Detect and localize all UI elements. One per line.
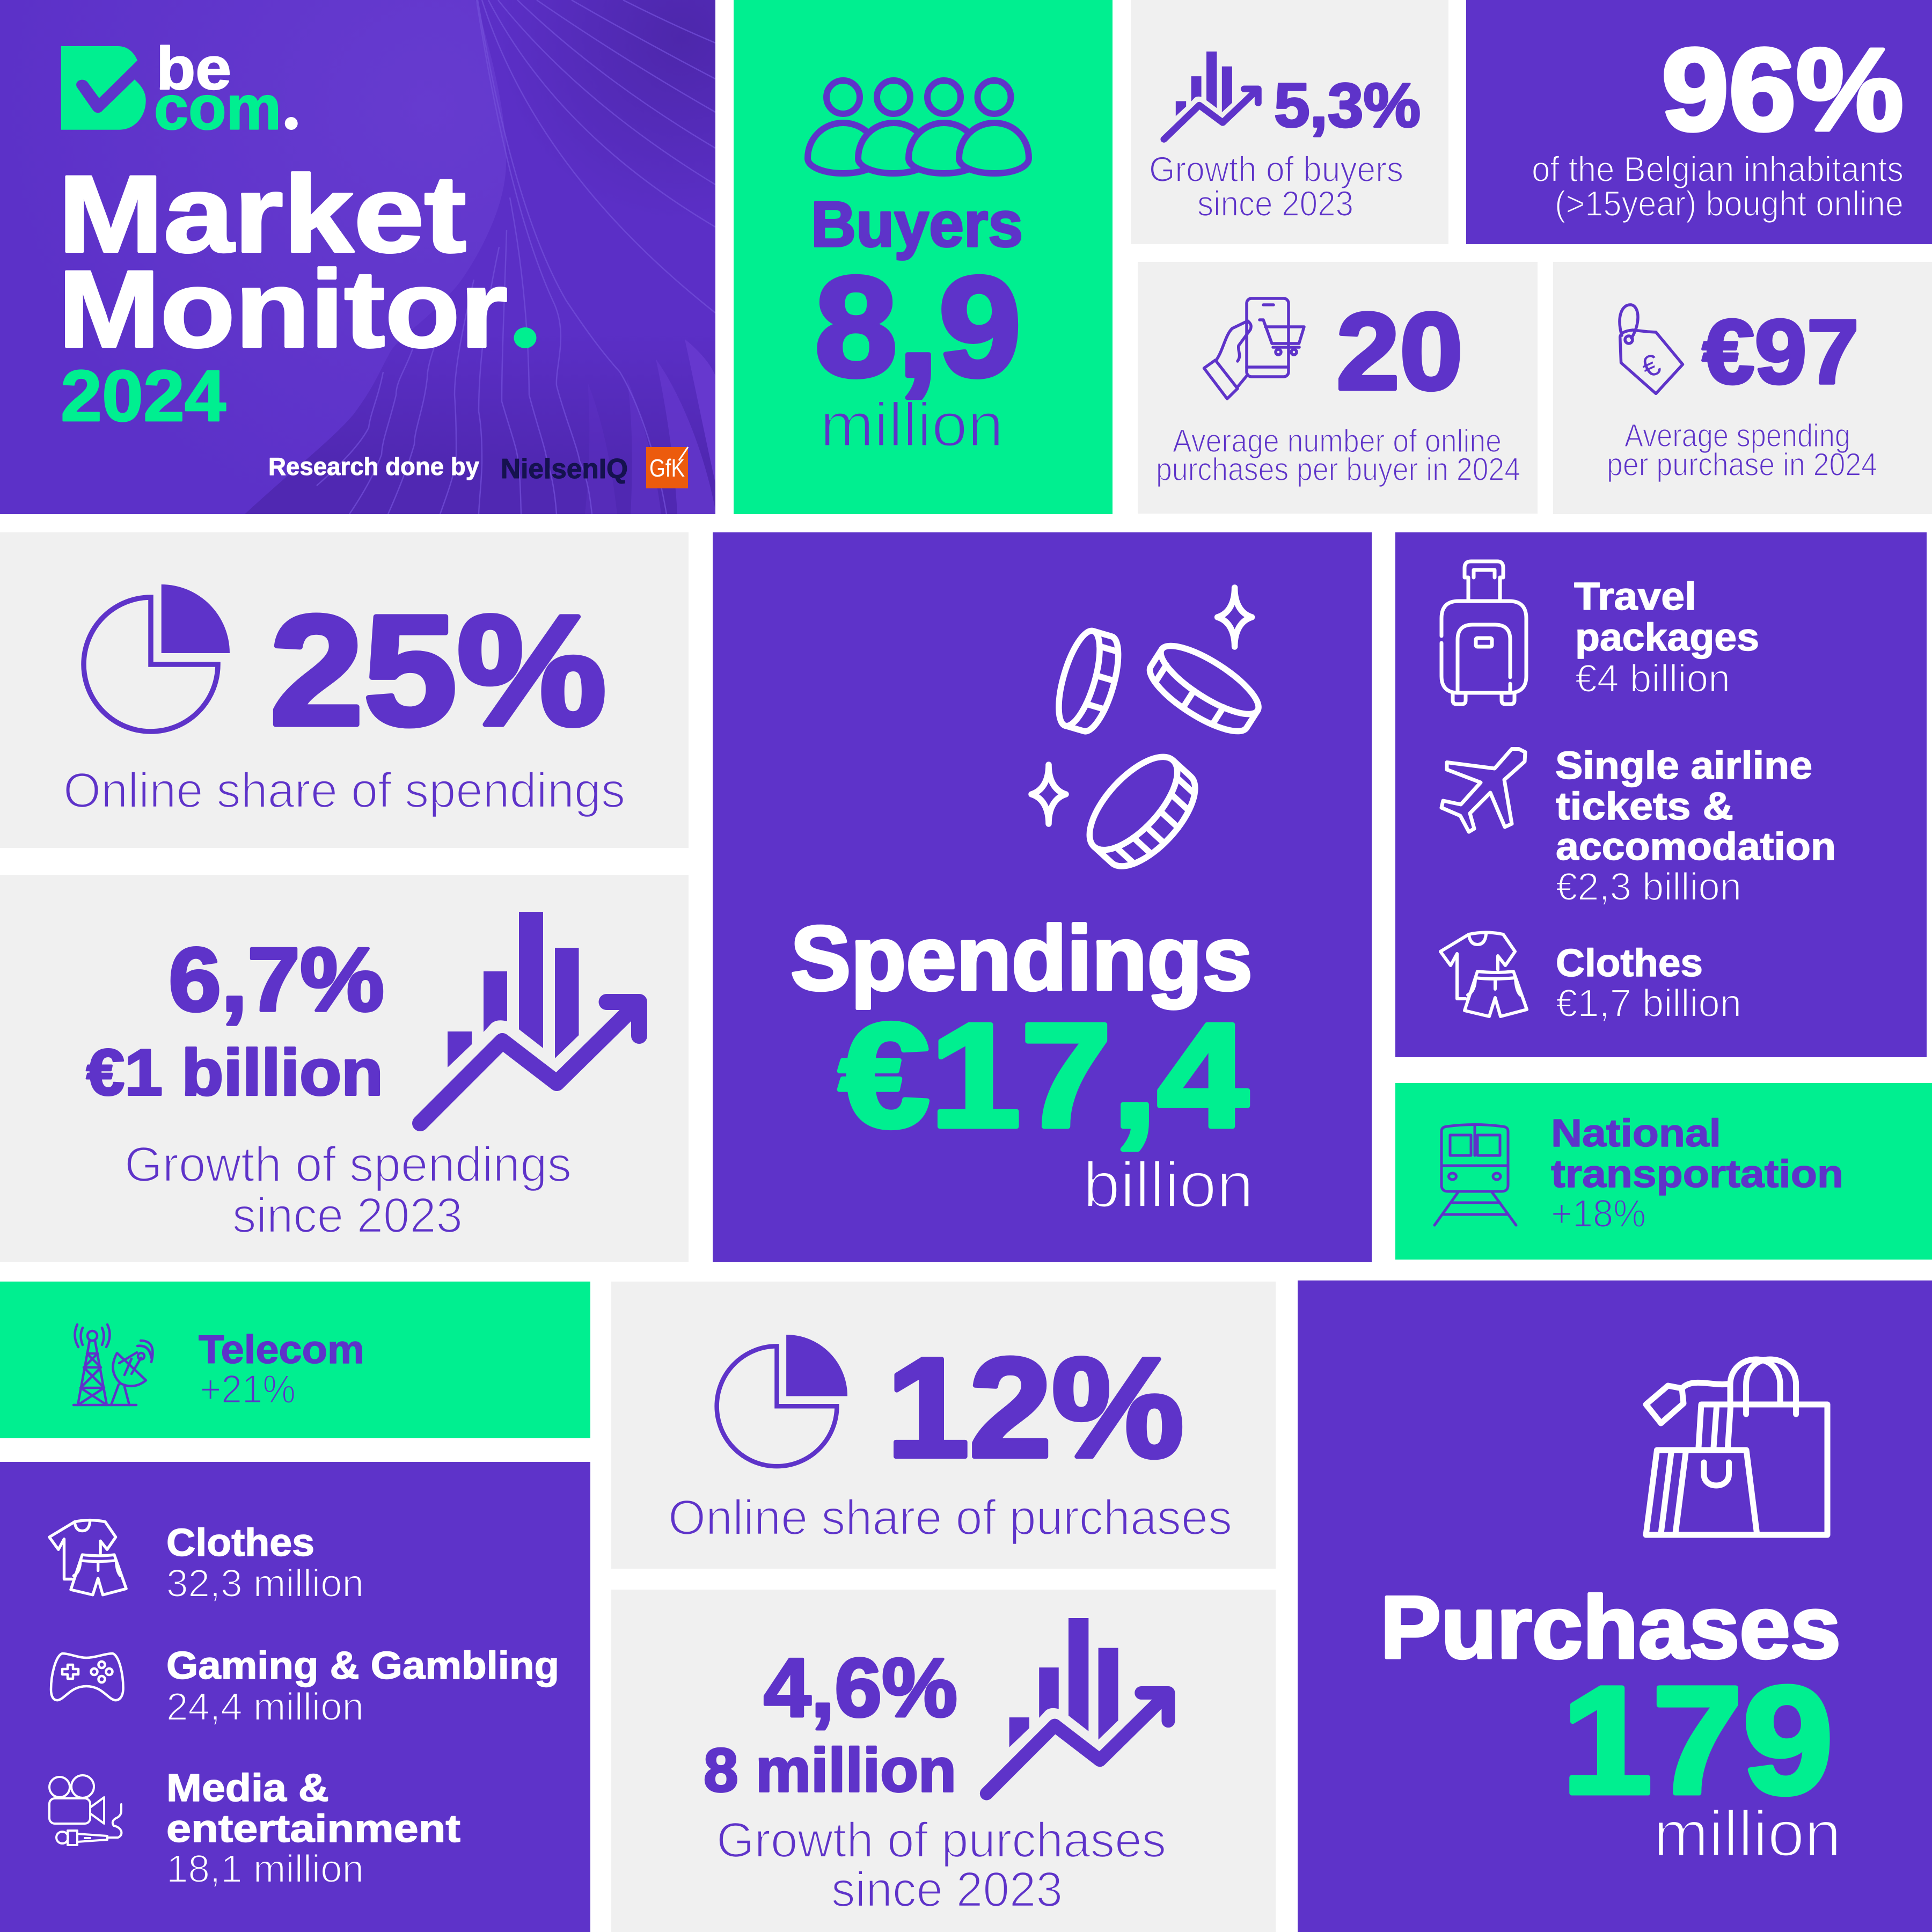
icon: film camera and microphone xyxy=(49,1775,121,1845)
research credit: Research done by xyxy=(268,452,479,480)
icon: chart xyxy=(1164,52,1258,140)
caption: of the Belgian inhabitants xyxy=(1532,149,1904,189)
logo: be xyxy=(156,35,231,102)
value: €97 xyxy=(1702,301,1859,403)
caption: Average number of online xyxy=(1173,423,1502,459)
caption: per purchase in 2024 xyxy=(1607,447,1877,482)
category: national transportation: transportation xyxy=(1551,1153,1843,1196)
category: media and entertainment xyxy=(166,1767,460,1891)
panel: growth of spendings xyxy=(0,875,689,1262)
panel: spending categories xyxy=(1395,532,1927,1057)
caption: Growth of buyers xyxy=(1149,149,1403,189)
panel: spending per purchase xyxy=(1553,262,1932,514)
category: telecom: Telecom xyxy=(199,1327,364,1372)
value: amount: 8 million xyxy=(704,1736,956,1805)
category: clothes xyxy=(1556,942,1741,1025)
caption: Online share of spendings xyxy=(63,763,625,818)
heading: Buyers xyxy=(811,188,1023,260)
caption: since 2023 xyxy=(1197,184,1353,223)
category: travel packages: packages xyxy=(1575,616,1759,659)
icon: clothes xyxy=(49,1520,126,1595)
caption: since 2023 xyxy=(831,1862,1063,1917)
header background fan xyxy=(215,0,715,515)
value: 20 xyxy=(1336,290,1463,413)
category: telecom: +21% xyxy=(200,1367,296,1411)
category: travel packages xyxy=(1574,575,1759,700)
unit: million xyxy=(820,391,1004,459)
category: gaming and gambling xyxy=(166,1644,559,1729)
icon: coins and sparkles xyxy=(1031,588,1267,880)
caption: Growth of spendings xyxy=(125,1137,572,1192)
panel: purchases xyxy=(1298,1280,1932,1932)
caption: purchases per buyer in 2024 xyxy=(1156,451,1520,487)
category: clothes: Clothes xyxy=(166,1521,314,1564)
category: clothes: €1,7 billion xyxy=(1556,982,1741,1025)
category: airline tickets: tickets & xyxy=(1556,785,1733,828)
category: national transportation: National xyxy=(1551,1112,1721,1155)
title: Monitor xyxy=(58,248,508,370)
icon: suitcase xyxy=(1441,561,1526,704)
caption xyxy=(1607,418,1877,482)
year: 2024 xyxy=(61,355,226,436)
category: airline tickets: €2,3 billion xyxy=(1556,866,1741,909)
category: national transportation: +18% xyxy=(1551,1192,1646,1235)
icon: chart xyxy=(986,1618,1168,1794)
icon: game controller xyxy=(51,1653,123,1700)
logo: com xyxy=(154,73,281,143)
category: travel packages: €4 billion xyxy=(1575,657,1730,700)
category: airline tickets: Single airline xyxy=(1555,744,1812,787)
caption: Average spending xyxy=(1624,418,1850,453)
category: clothes: 32,3 million xyxy=(166,1562,364,1605)
caption: Online share of purchases xyxy=(668,1490,1232,1545)
icon: hand with phone xyxy=(1204,298,1304,399)
panel: online share of spendings xyxy=(0,532,689,848)
icon: clothes xyxy=(1440,933,1527,1016)
category: travel packages: Travel xyxy=(1574,575,1696,618)
panel: spendings xyxy=(713,532,1372,1262)
panel: purchase categories xyxy=(0,1462,590,1932)
caption xyxy=(716,1813,1166,1917)
caption xyxy=(1156,423,1520,487)
logo: NielsenIQ: NielsenIQ xyxy=(501,453,628,485)
value: €17,4 xyxy=(839,993,1249,1158)
caption xyxy=(1532,149,1904,223)
panel: header xyxy=(0,0,715,515)
value: 12% xyxy=(887,1328,1184,1487)
value: 96% xyxy=(1662,25,1904,155)
panel: 96 percent xyxy=(1466,0,1932,244)
category: media and entertainment: Media & xyxy=(166,1767,329,1810)
panel: growth of buyers xyxy=(1131,0,1448,244)
logo xyxy=(61,45,298,130)
icon: chart xyxy=(420,912,639,1123)
logo: GfK: GfK xyxy=(649,454,685,482)
value: percent: 6,7% xyxy=(169,929,384,1030)
heading: Spendings xyxy=(791,908,1253,1009)
category: telecom xyxy=(199,1327,364,1411)
category: airline tickets xyxy=(1555,744,1836,909)
icon: four people xyxy=(808,80,1029,173)
icon: airplane xyxy=(1441,749,1525,832)
panel: national transportation xyxy=(1395,1083,1932,1260)
logo: GfK xyxy=(646,447,688,488)
panel: growth of purchases xyxy=(611,1590,1276,1932)
title xyxy=(65,171,537,349)
panel: purchases per buyer xyxy=(1138,262,1538,514)
caption: (>15year) bought online xyxy=(1555,184,1904,223)
heading: Purchases xyxy=(1380,1578,1841,1677)
category: media and entertainment: 18,1 million xyxy=(166,1848,364,1891)
category: clothes xyxy=(166,1521,364,1605)
icon: price tag: € xyxy=(1636,347,1665,385)
icon: pie chart xyxy=(717,1335,847,1466)
category: national transportation xyxy=(1551,1112,1843,1235)
icon: telecom tower and dish xyxy=(74,1324,152,1405)
value: amount: €1 billion xyxy=(86,1036,383,1109)
value: 179 xyxy=(1562,1655,1833,1826)
panel: telecom xyxy=(0,1282,590,1438)
title: Market xyxy=(58,153,466,275)
panel: online share of purchases xyxy=(611,1282,1276,1569)
icon: price tag xyxy=(1620,305,1683,393)
caption: since 2023 xyxy=(232,1188,463,1243)
value: 25% xyxy=(270,583,606,758)
unit: billion xyxy=(1083,1149,1254,1221)
icon: shopping bags xyxy=(1646,1359,1827,1535)
unit: million xyxy=(1653,1798,1841,1870)
category: airline tickets: accomodation xyxy=(1556,825,1836,868)
caption xyxy=(1149,149,1403,223)
icon: train xyxy=(1435,1125,1516,1225)
category: media and entertainment: entertainment xyxy=(166,1807,460,1850)
icon: pie chart xyxy=(84,584,230,731)
caption: Growth of purchases xyxy=(716,1813,1166,1868)
category: gaming and gambling: Gaming & Gambling xyxy=(166,1644,559,1687)
value: 5,3% xyxy=(1274,70,1421,140)
category: clothes: Clothes xyxy=(1556,942,1703,985)
panel: buyers xyxy=(734,0,1113,514)
value: 8,9 xyxy=(815,247,1021,406)
caption xyxy=(125,1137,572,1243)
value: percent: 4,6% xyxy=(764,1641,957,1734)
category: gaming and gambling: 24,4 million xyxy=(166,1686,364,1729)
